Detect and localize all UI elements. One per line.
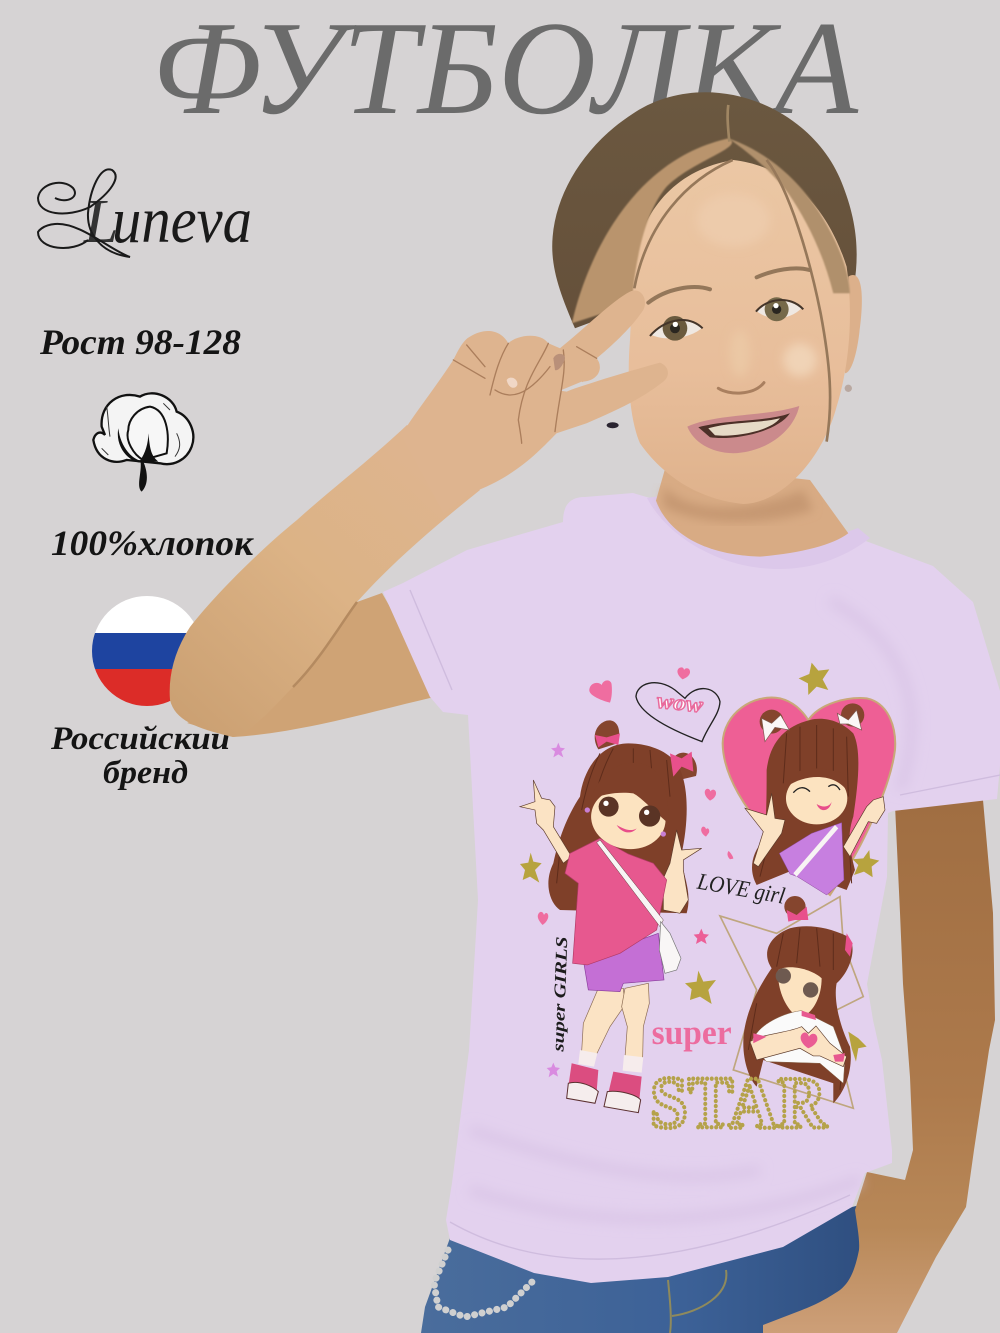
elbow crease [293, 602, 357, 687]
brand origin text: бренд [103, 755, 188, 791]
right earring [845, 385, 852, 392]
right tan hair wedge [728, 138, 850, 293]
girl head [552, 92, 862, 557]
brand logo [38, 169, 252, 257]
t-shirt [383, 493, 1000, 1283]
brand origin text: Российский [50, 721, 230, 757]
small stars [547, 743, 709, 1077]
material text: 100%хлопок [51, 523, 254, 563]
star dotted text: STAR [650, 1062, 828, 1144]
jeans chain [434, 1250, 534, 1317]
super text: super [652, 1014, 732, 1052]
brand logo: L [83, 188, 118, 256]
ear [845, 275, 862, 373]
chin shadow [663, 487, 813, 522]
jeans [421, 1205, 860, 1333]
part line [728, 105, 729, 142]
large pink heart [723, 698, 895, 895]
shirt print [520, 663, 895, 1144]
left earring [607, 422, 619, 428]
star outline [720, 897, 863, 1108]
pink hearts [538, 667, 733, 925]
mouth [687, 406, 799, 453]
brand origin text [50, 721, 230, 791]
gold stars [520, 663, 879, 1062]
first character: pink shirt [520, 720, 702, 1113]
face [629, 160, 850, 504]
hair [552, 92, 857, 328]
wow heart: wow [656, 688, 704, 717]
super girls text: super GIRLS [548, 936, 571, 1053]
neck [656, 463, 848, 557]
upper arm [187, 593, 443, 737]
love girl text: LOVE girl [695, 869, 787, 910]
icon: cotton boll [93, 393, 193, 492]
size range text: Рост 98-128 [39, 322, 241, 362]
face strands [634, 160, 830, 442]
nose [718, 383, 764, 393]
wow heart [636, 683, 720, 742]
cheek highlights [697, 193, 817, 377]
icon: russian flag [92, 596, 202, 706]
left tan hair wedge [572, 138, 732, 323]
hand with peace sign [400, 291, 668, 513]
right eye [756, 297, 803, 321]
brand logo: uneva [112, 184, 252, 257]
right arm and hand [763, 800, 995, 1333]
left eye [650, 316, 703, 341]
eyebrows [648, 268, 809, 303]
forearm [170, 425, 480, 737]
second character: purple top [745, 703, 885, 895]
third character: white tee [743, 896, 853, 1103]
